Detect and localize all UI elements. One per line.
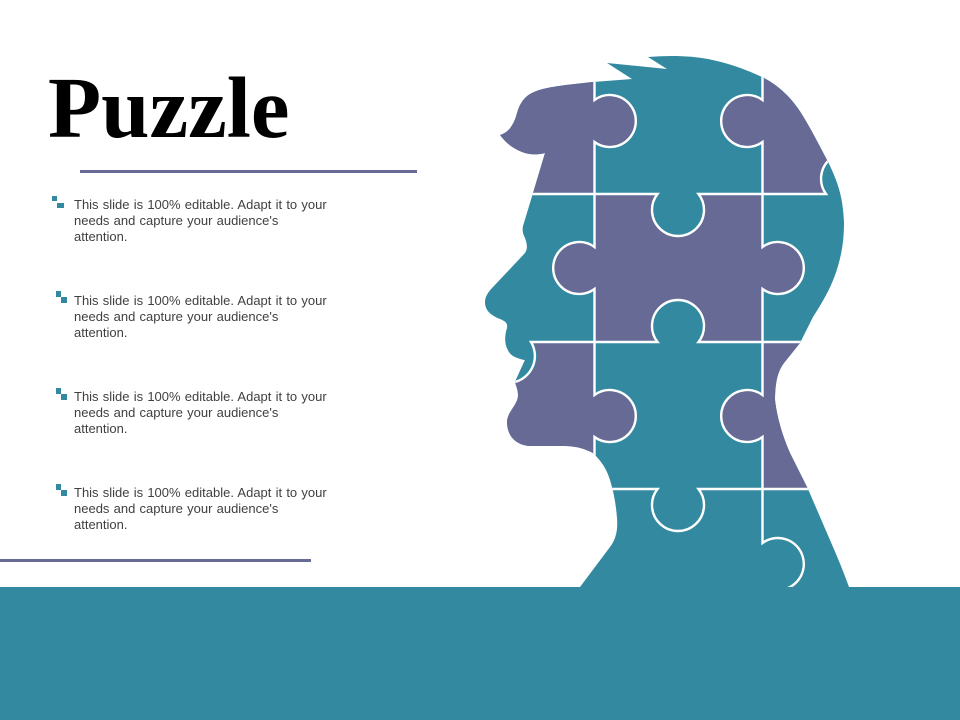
- bullet 3: attention.: [74, 421, 128, 436]
- bullet 4: This slide is 100% editable. Adapt it to your: [74, 485, 327, 500]
- bullet 2: This slide is 100% editable. Adapt it to your: [74, 293, 327, 308]
- bullet 4: [56, 484, 327, 532]
- bullet 2: needs and capture your audience's: [74, 309, 278, 324]
- title underline: [80, 170, 417, 173]
- bullet 4: attention.: [74, 517, 128, 532]
- bullet 3: needs and capture your audience's: [74, 405, 278, 420]
- bullet 3: [56, 388, 327, 436]
- bullet 1: This slide is 100% editable. Adapt it to your: [74, 197, 327, 212]
- bullet 1: needs and capture your audience's: [74, 213, 278, 228]
- bullet 4: needs and capture your audience's: [74, 501, 278, 516]
- bullet 1: [52, 196, 327, 244]
- title: Puzzle: [48, 59, 290, 156]
- bottom left rule: [0, 559, 311, 562]
- bullet 1: attention.: [74, 229, 128, 244]
- head puzzle: [485, 56, 849, 587]
- bottom band: [0, 587, 960, 720]
- bullet 2: [56, 291, 327, 340]
- bullet 2: attention.: [74, 325, 128, 340]
- bullet 3: This slide is 100% editable. Adapt it to your: [74, 389, 327, 404]
